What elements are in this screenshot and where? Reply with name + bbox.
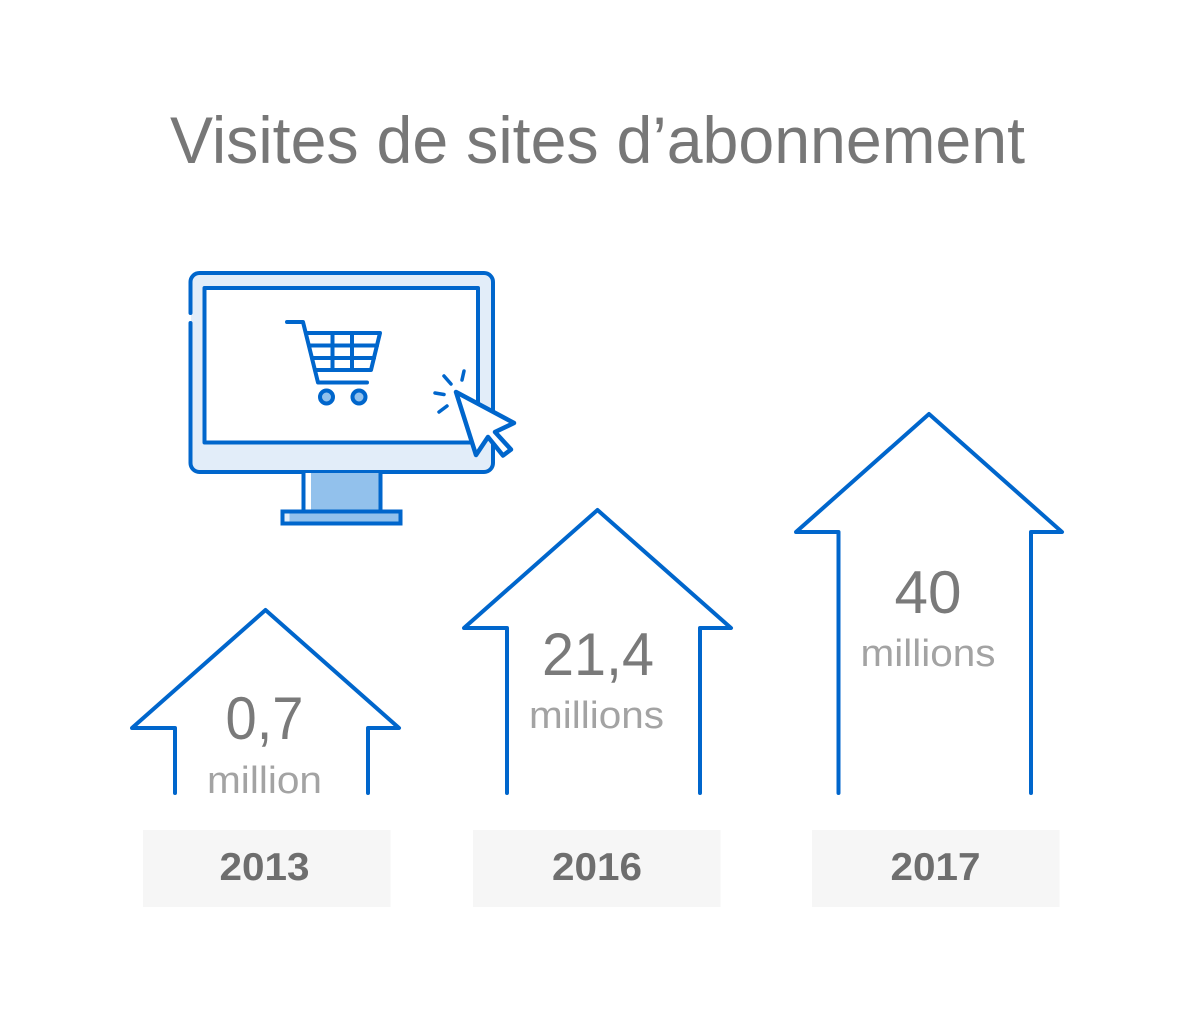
icon: mouse cursor: [435, 371, 514, 456]
monitor body: [190, 273, 493, 472]
arrow: 2016: [464, 510, 731, 793]
year label: 2016: [473, 830, 720, 907]
icon: computer monitor with cart: [190, 273, 514, 524]
value: 21,4: 21,4: [542, 621, 654, 688]
unit: million: million: [207, 760, 322, 802]
arrow: 2013: [132, 610, 399, 802]
monitor stand: [282, 473, 400, 524]
year label: 2016: 2016: [552, 846, 642, 889]
year label: 2013: [143, 830, 390, 907]
value: 0,7: 0,7: [226, 685, 304, 752]
title: Visites de sites d’abonnement: [170, 103, 1025, 177]
value: 40: 40: [894, 559, 962, 626]
year label: 2017: [812, 830, 1060, 907]
icon: shopping cart: [287, 322, 380, 404]
unit: millions: millions: [529, 695, 664, 737]
unit: millions: millions: [860, 633, 996, 675]
arrow: 2017: [796, 414, 1062, 793]
year label: 2013: 2013: [220, 846, 310, 889]
year label: 2017: 2017: [890, 846, 980, 889]
